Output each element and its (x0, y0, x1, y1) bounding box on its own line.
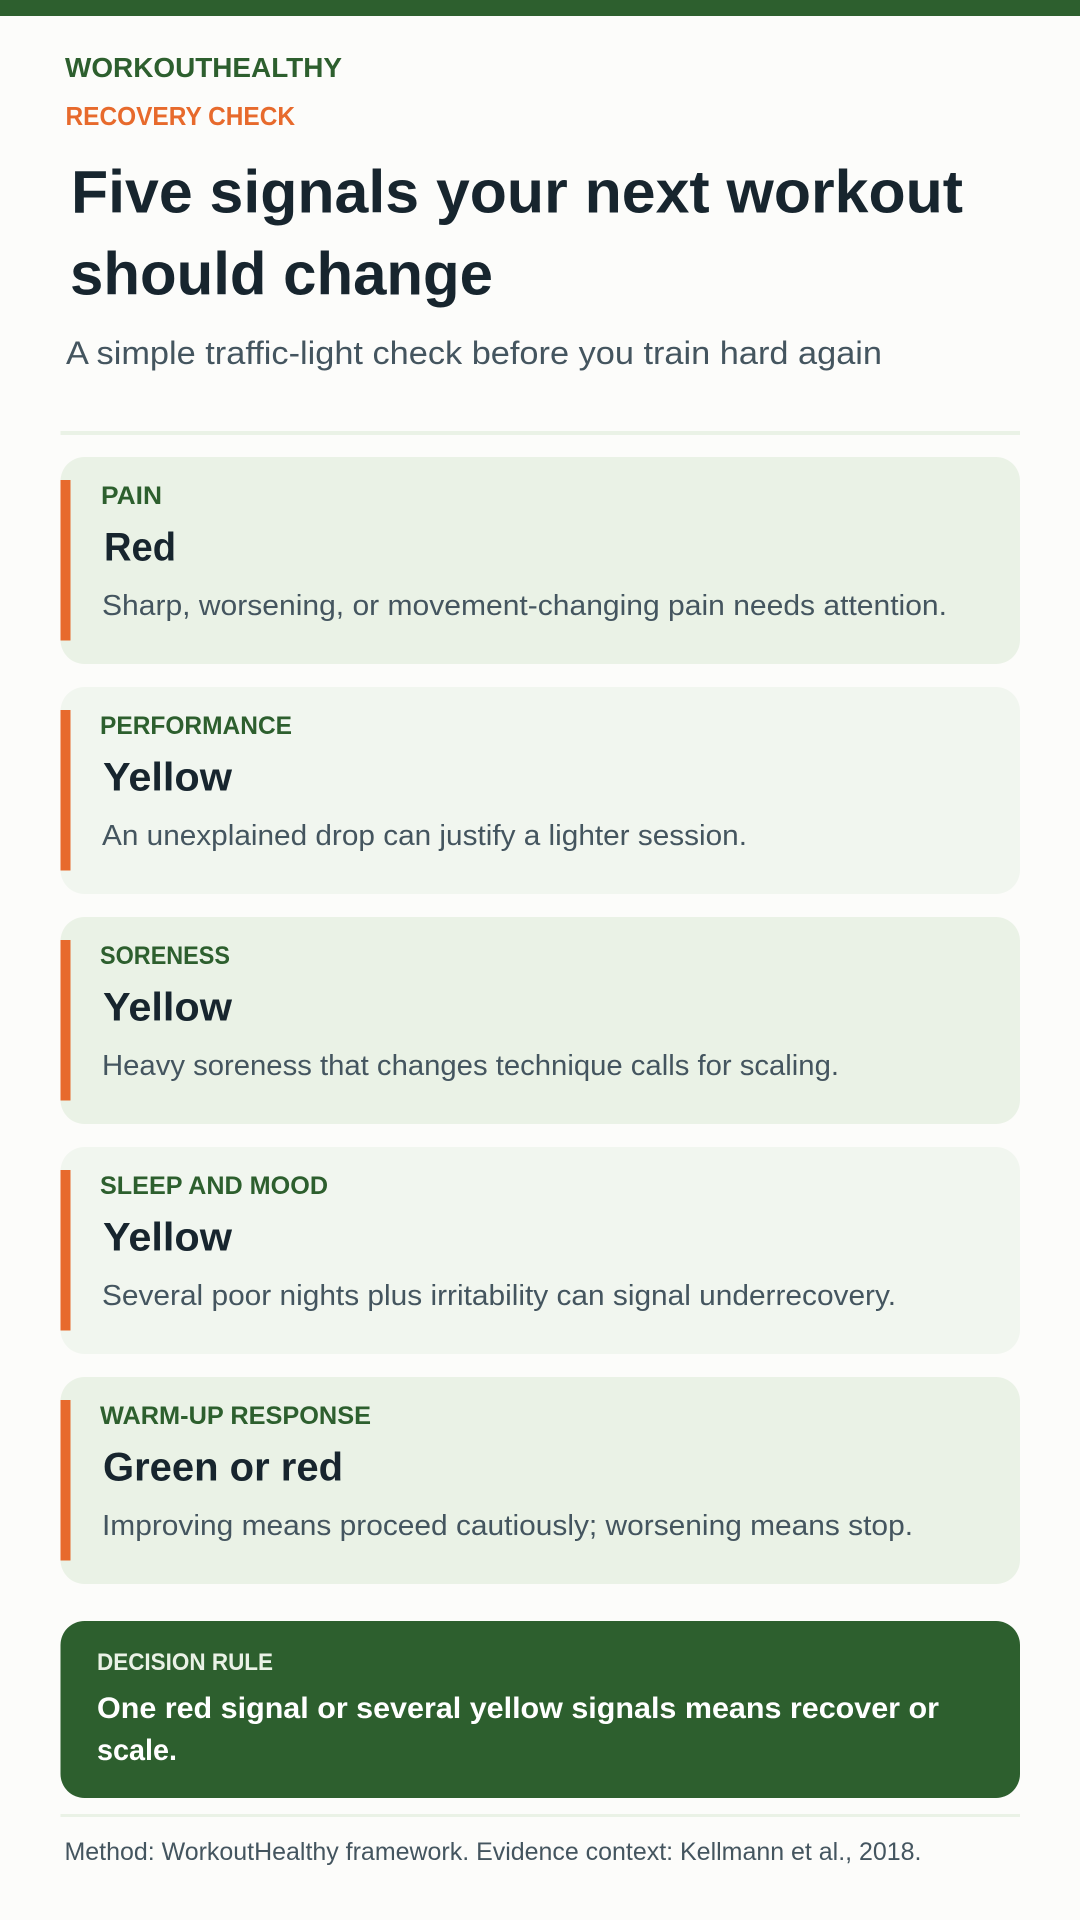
signal label: PERFORMANCE (100, 712, 292, 740)
panel: decision rule (60, 1621, 1020, 1798)
signal label: SLEEP AND MOOD (100, 1172, 328, 1200)
panel: sleep and mood (60, 1147, 1020, 1354)
signal label: WARM-UP RESPONSE (100, 1402, 371, 1430)
subtitle: A simple traffic-light check before you train hard again (66, 335, 882, 371)
signal description: Heavy soreness that changes technique calls for scaling. (102, 1050, 839, 1082)
title: Five signals your next workout (71, 158, 963, 226)
panel: pain (60, 457, 1020, 664)
signal status: Yellow (103, 756, 233, 800)
signal status: Yellow (103, 1216, 233, 1260)
accent bar (60, 1170, 70, 1330)
decision label: DECISION RULE (97, 1649, 273, 1676)
signal label: SORENESS (100, 942, 230, 970)
accent bar (60, 1400, 70, 1560)
signal description: An unexplained drop can justify a lighter session. (102, 820, 747, 852)
decision statement (97, 1692, 939, 1767)
signal status: Red (104, 526, 176, 570)
signal description: Several poor nights plus irritability can signal underrecovery. (102, 1280, 896, 1312)
panel: warm-up response (60, 1377, 1020, 1584)
top bar (0, 0, 1080, 16)
decision statement: scale. (97, 1734, 177, 1767)
panel: performance (60, 687, 1020, 894)
accent bar (60, 940, 70, 1100)
eyebrow: RECOVERY CHECK (66, 101, 295, 131)
title: should change (70, 240, 493, 308)
title (70, 158, 963, 308)
panel: soreness (60, 917, 1020, 1124)
signal description: Sharp, worsening, or movement-changing pain needs attention. (102, 590, 947, 622)
footer source note: Method: WorkoutHealthy framework. Evidence context: Kellmann et al., 2018. (64, 1838, 922, 1866)
signal label: PAIN (101, 482, 162, 510)
signal status: Yellow (103, 986, 233, 1030)
decision statement: One red signal or several yellow signals means recover or (97, 1692, 939, 1725)
accent bar (60, 710, 70, 870)
signal status: Green or red (103, 1446, 343, 1490)
brand name: WORKOUTHEALTHY (65, 52, 342, 83)
signal description: Improving means proceed cautiously; worsening means stop. (102, 1510, 913, 1542)
accent bar (60, 480, 70, 640)
